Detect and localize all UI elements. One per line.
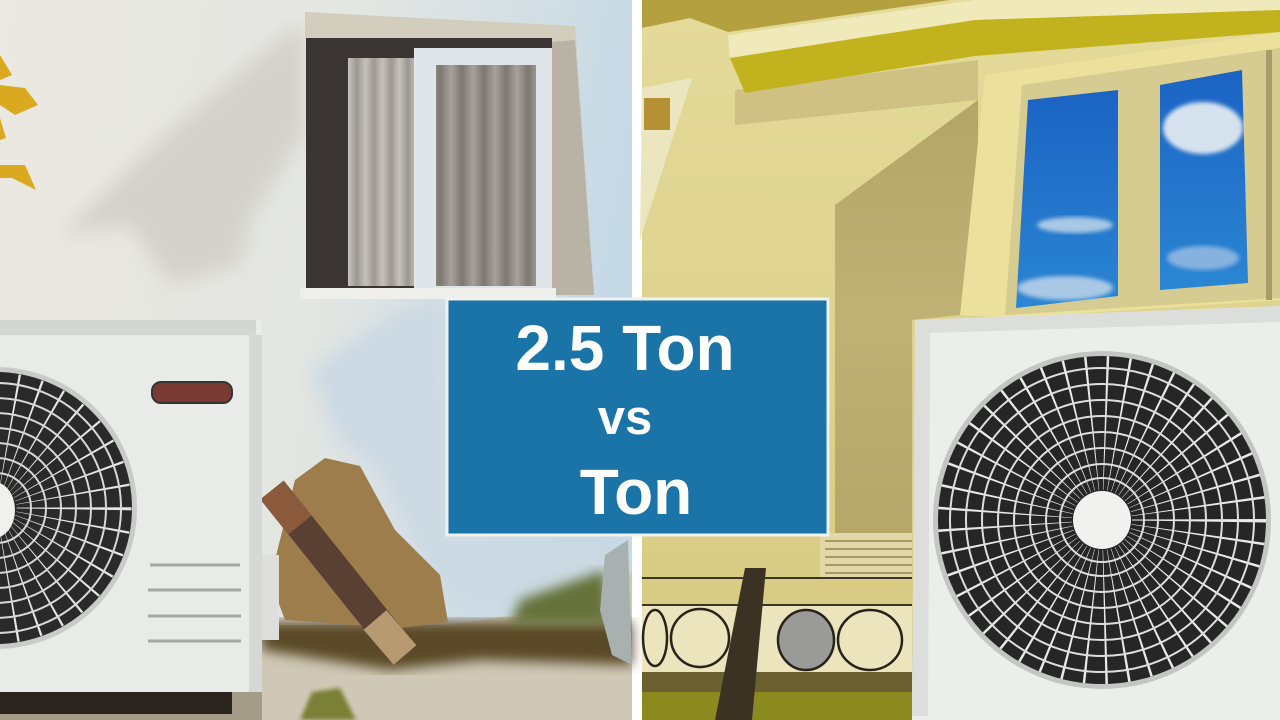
window trim	[305, 12, 594, 295]
center title box	[447, 299, 828, 535]
right curtain	[436, 65, 536, 286]
vent slots	[148, 565, 241, 641]
panel: left photo, white house wall	[0, 0, 632, 720]
rock	[270, 458, 448, 628]
wooden post	[715, 568, 766, 720]
badge	[152, 382, 232, 403]
balcony door at left	[640, 78, 692, 240]
panel: right photo, yellow house wall	[640, 0, 1280, 720]
wall shadow	[835, 100, 978, 535]
ground	[262, 570, 632, 720]
window	[300, 12, 594, 299]
wall shadow lower right	[310, 300, 610, 600]
wall vent	[820, 533, 912, 578]
grass	[642, 692, 912, 720]
wall shadow from tree	[60, 30, 305, 285]
grass tufts	[300, 688, 356, 720]
stone at right edge	[600, 540, 632, 665]
right outdoor unit	[912, 306, 1280, 720]
clouds	[1163, 102, 1243, 154]
window frame	[414, 48, 552, 292]
left curtain	[348, 58, 416, 286]
left outdoor unit	[0, 320, 279, 720]
left glass pane	[1016, 90, 1118, 308]
heading: 2.5 Ton: 2.5 Ton	[515, 312, 735, 384]
yellow leaves	[0, 55, 38, 190]
heading: Ton: Ton	[580, 456, 692, 528]
roof eave	[642, 0, 1280, 93]
window sill	[300, 288, 556, 299]
fan grille	[933, 351, 1271, 689]
balcony railing	[642, 578, 912, 696]
drain pipe	[272, 490, 405, 655]
right glass pane	[1160, 70, 1248, 290]
fan grille	[0, 367, 137, 649]
heading: vs: vs	[598, 391, 652, 445]
right window	[960, 32, 1280, 318]
